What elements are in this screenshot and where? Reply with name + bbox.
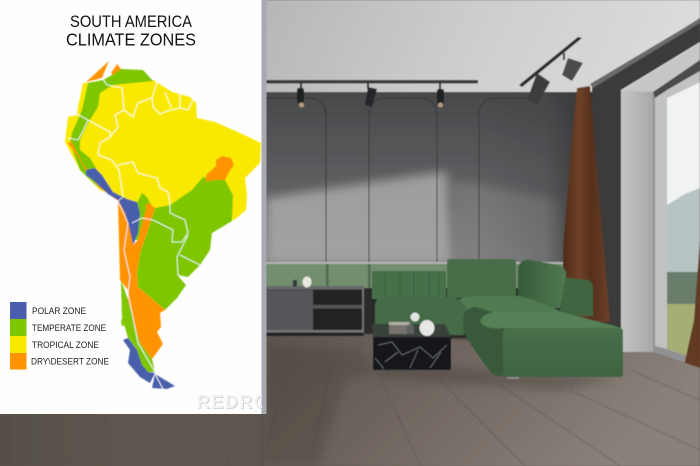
polar zone: tierra del fuego xyxy=(152,374,175,389)
chaise top xyxy=(480,312,622,328)
temperate zone: chile xyxy=(121,280,155,372)
polar zone: patagonia xyxy=(123,338,155,383)
curtain left xyxy=(563,86,610,322)
marble coffee table xyxy=(372,324,451,370)
sofa back cushion xyxy=(447,259,516,298)
watermark: REDRO xyxy=(198,392,270,412)
poster side edge xyxy=(261,0,266,414)
watermark: REDRO xyxy=(197,392,270,412)
legend: temperate zone: TEMPERATE ZONE xyxy=(32,323,106,333)
spotlight 3 xyxy=(437,83,444,108)
tropical zone xyxy=(65,80,261,221)
chaise side xyxy=(463,307,503,377)
legend: dry desert zone: DRY\DESERT ZONE xyxy=(31,356,109,366)
sofa xyxy=(372,259,623,379)
country borders xyxy=(68,78,200,389)
sofa back right xyxy=(518,260,566,308)
temperate zone: north-west band xyxy=(70,69,153,190)
dark backdrop behind furniture xyxy=(266,288,626,338)
legend xyxy=(10,302,109,370)
poster sheet xyxy=(0,0,262,414)
dry zone: brazil patch xyxy=(206,156,234,182)
dry desert zone xyxy=(68,141,165,359)
angled track rail xyxy=(519,37,582,87)
legend: polar zone: POLAR ZONE xyxy=(32,306,86,316)
decor vases on console xyxy=(293,276,312,288)
ceiling xyxy=(262,0,700,94)
curtain right xyxy=(678,240,700,407)
title xyxy=(66,13,196,50)
green wainscot xyxy=(266,262,596,290)
sofa arm xyxy=(560,277,593,316)
track light rail xyxy=(266,80,478,84)
temperate zone: central patch xyxy=(134,193,150,240)
sofa back left xyxy=(372,271,446,299)
dry zone: north patch xyxy=(111,64,121,75)
dry zone: north tip xyxy=(86,61,109,82)
temperate zone: south-east xyxy=(137,177,233,310)
console cabinet xyxy=(266,286,364,336)
seat left xyxy=(375,297,467,335)
map of South America xyxy=(65,61,261,389)
floor xyxy=(0,334,700,466)
window view xyxy=(667,82,700,360)
spotlight 2 xyxy=(365,83,377,107)
watermark xyxy=(198,395,262,408)
legend: tropical zone: TROPICAL ZONE xyxy=(32,340,99,350)
title: SOUTH AMERICA xyxy=(70,13,192,31)
temperate zone: island xyxy=(121,318,125,326)
chaise front xyxy=(503,328,623,377)
dark side wall and ceiling beam xyxy=(590,18,700,326)
spotlight 1 xyxy=(297,83,304,108)
table decor xyxy=(389,312,434,336)
title: CLIMATE ZONES xyxy=(66,30,196,50)
back wall xyxy=(266,92,596,264)
polar zone: andes xyxy=(86,168,140,245)
angled spotlight upper xyxy=(562,53,583,81)
window frame xyxy=(653,60,700,368)
dry zone: small patch xyxy=(145,203,154,210)
angled spotlight lower xyxy=(527,73,550,105)
window pillar and soffit xyxy=(621,43,700,353)
seat middle xyxy=(458,296,566,314)
